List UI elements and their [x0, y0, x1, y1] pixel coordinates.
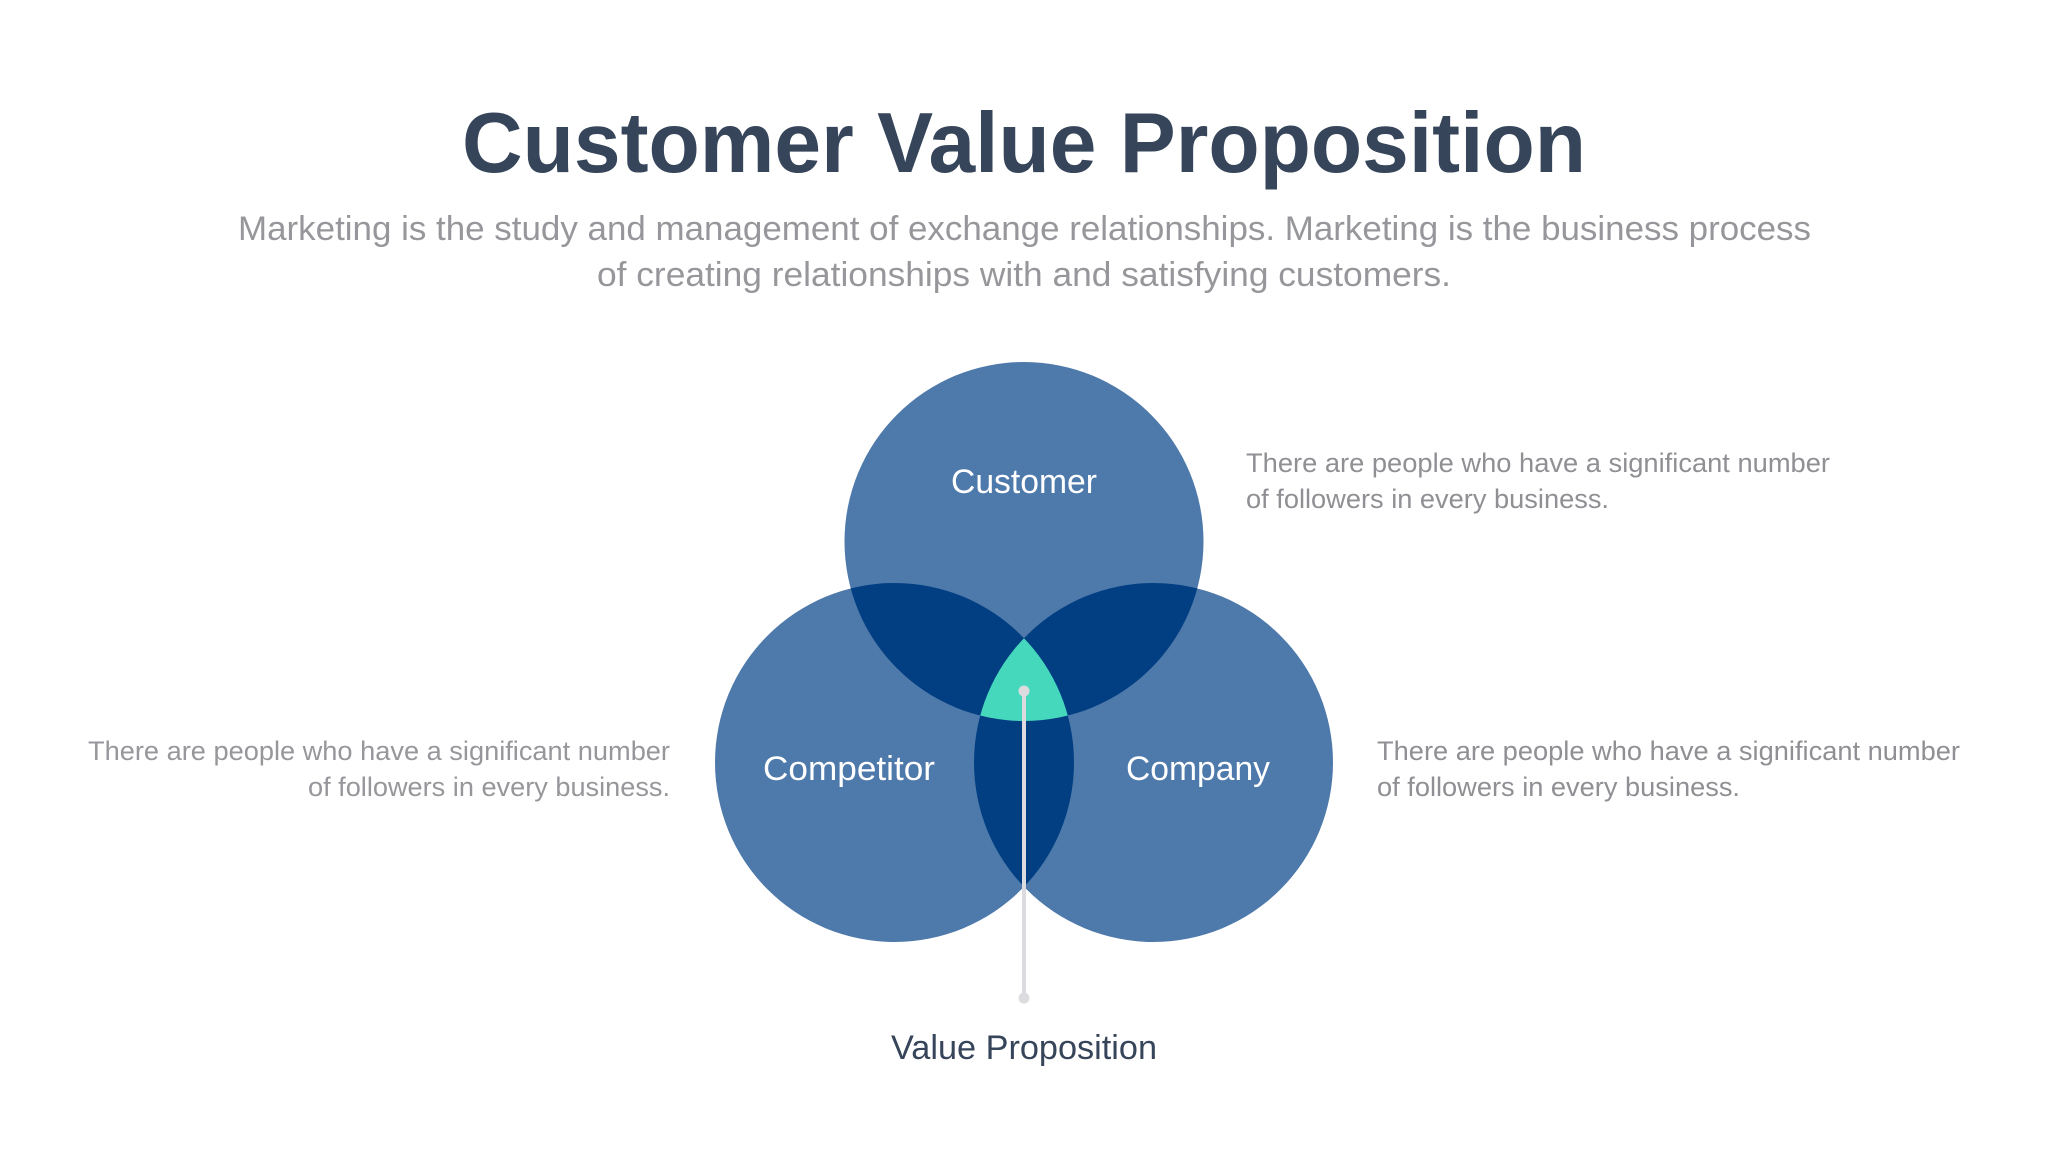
overlap: customer and company — [1024, 583, 1198, 716]
subtitle: of creating relationships with and satisfying customers. — [597, 256, 1451, 294]
circle: company — [974, 583, 1333, 942]
overlap: competitor and company — [974, 716, 1074, 884]
venn diagram — [715, 362, 1333, 942]
label: company: Company — [1126, 750, 1270, 788]
text block: customer description: There are people who have a significant number — [1246, 448, 1830, 478]
text block: customer description: of followers in every business. — [1246, 484, 1609, 514]
label: value proposition: Value Proposition — [891, 1029, 1157, 1067]
text block: competitor description: There are people who have a significant number — [88, 736, 670, 766]
text block: company description: There are people who have a significant number — [1377, 736, 1960, 766]
subtitle: Marketing is the study and management of exchange relationships. Marketing is the business process — [238, 210, 1811, 248]
label: customer: Customer — [951, 463, 1097, 501]
subtitle — [238, 210, 1811, 294]
text block: company description: of followers in every business. — [1377, 772, 1740, 802]
title: Customer Value Proposition — [462, 96, 1586, 191]
text block: competitor description: of followers in every business. — [308, 772, 670, 802]
overlap: customer and competitor — [850, 583, 1024, 716]
text block: company description — [1377, 736, 1960, 802]
label: competitor: Competitor — [763, 750, 935, 788]
circle: competitor — [715, 583, 1074, 942]
text block: competitor description — [88, 736, 670, 802]
circle: customer — [844, 362, 1204, 721]
text block: customer description — [1246, 448, 1830, 514]
connector line — [1018, 686, 1030, 1004]
overlap: value proposition centre — [980, 638, 1068, 721]
